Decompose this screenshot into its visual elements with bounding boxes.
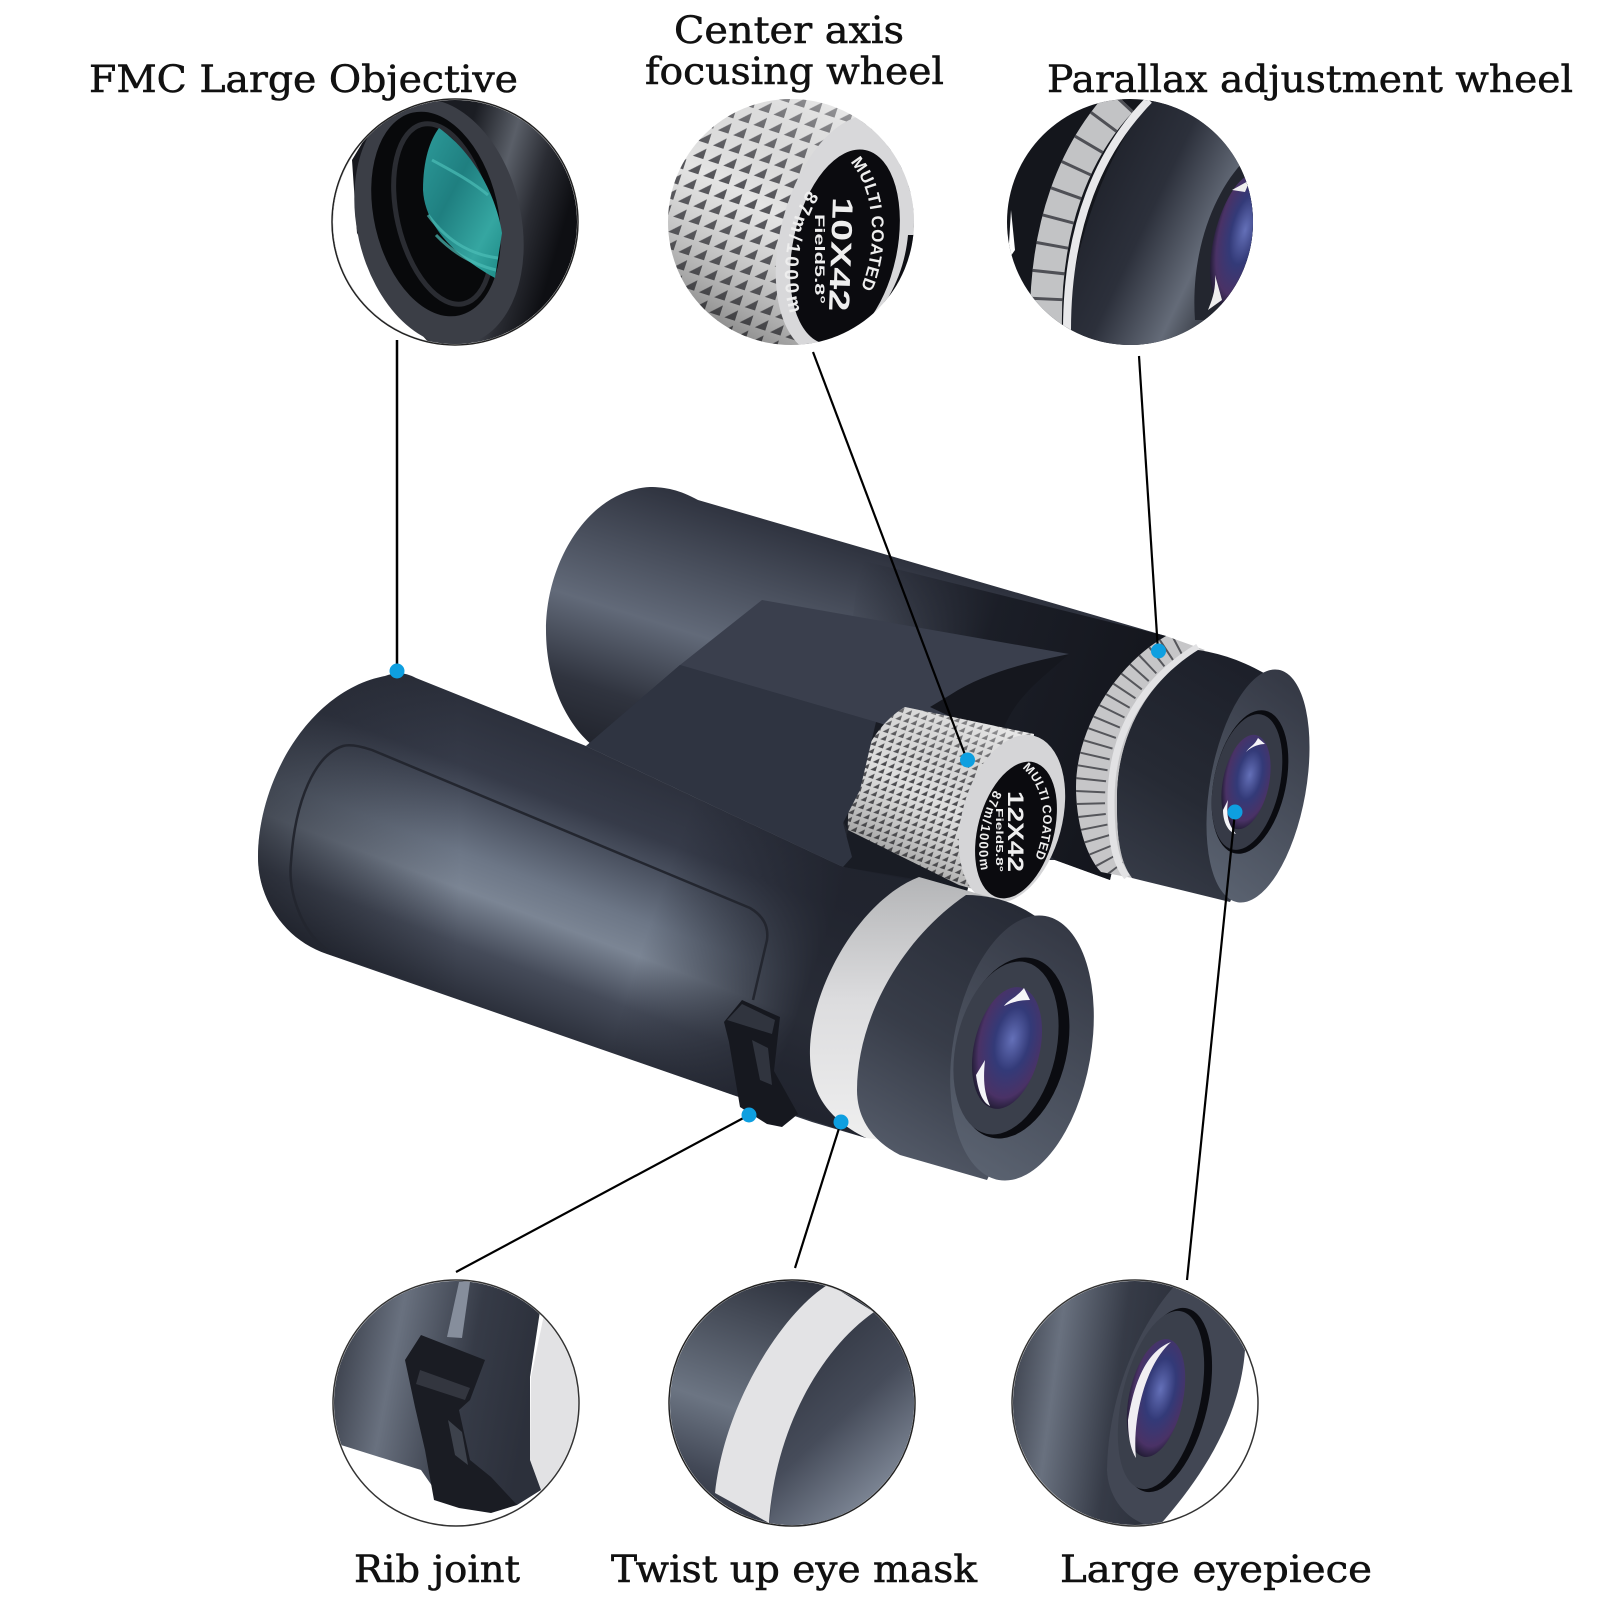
marker dot <box>834 1114 848 1130</box>
inset: knurled wheel cap <box>668 99 914 345</box>
marker dot <box>960 752 975 768</box>
inset: ribbed wheel <box>1007 99 1253 345</box>
callout: Rib joint <box>330 1108 756 1591</box>
callout: Parallax adjustment wheel <box>1000 58 1573 658</box>
leader line <box>456 1115 749 1272</box>
heading: Large eyepiece <box>1060 1548 1372 1591</box>
callout: Twist up eye mask <box>611 1114 978 1591</box>
inset: strap lug <box>334 1281 578 1513</box>
center focusing wheel <box>848 707 1066 902</box>
leader line <box>795 1122 841 1268</box>
callout: Large eyepiece <box>1005 804 1372 1591</box>
marker dot <box>1151 644 1166 658</box>
rear barrel <box>546 487 1166 880</box>
inset: knurled wheel cap: MULTI COATED <box>851 156 884 290</box>
heading: Rib joint <box>354 1548 520 1591</box>
binoculars product photo <box>258 487 1310 1180</box>
marker dot <box>1228 804 1242 820</box>
brand plate: Brightsky <box>672 714 802 765</box>
bridge plate <box>586 600 1069 900</box>
heading: Twist up eye mask <box>611 1548 978 1591</box>
brand plate: Brightsky: Brightsky <box>682 714 798 765</box>
inset: knurled wheel cap: Field5.8° <box>812 214 828 304</box>
leader line <box>1187 812 1235 1280</box>
leader line <box>813 352 967 760</box>
inset: eyepiece <box>1013 1281 1245 1525</box>
inset: objective lens <box>333 100 577 344</box>
inset outline <box>332 99 578 345</box>
heading: FMC Large Objective <box>89 58 518 101</box>
inset outline <box>333 1280 579 1526</box>
marker dot <box>390 664 404 678</box>
center focusing wheel: MULTI COATED <box>1022 762 1052 860</box>
inset outline <box>669 1280 915 1526</box>
heading: Parallax adjustment wheel <box>1047 58 1573 101</box>
heading: focusing wheel <box>645 50 944 93</box>
leader line <box>1139 356 1158 651</box>
inset outline <box>1012 1280 1258 1526</box>
front barrel <box>258 665 920 1138</box>
rear eyepiece <box>1117 650 1326 911</box>
center focusing wheel: 87m/1000m <box>979 791 1002 870</box>
marker dot <box>742 1108 756 1122</box>
center focusing wheel: 12X42 <box>1003 791 1028 872</box>
callout: FMC Large Objective <box>89 58 580 678</box>
inset: knurled wheel cap: 87m/1000m <box>784 192 818 312</box>
heading: Center axis <box>674 9 904 52</box>
strap lug / rib joint <box>724 1000 798 1127</box>
inset: knurled wheel cap: 10X42 <box>822 197 858 312</box>
rear parallax wheel <box>1076 636 1205 878</box>
leader line <box>396 340 398 671</box>
center focusing wheel: Field5.8° <box>993 808 1005 872</box>
front silver ring / twist up eye mask <box>810 877 1000 1150</box>
callout: Center axis focusing wheel <box>645 9 975 768</box>
heading <box>645 9 944 93</box>
inset: silver band <box>665 1278 920 1530</box>
front eyepiece <box>857 895 1113 1192</box>
